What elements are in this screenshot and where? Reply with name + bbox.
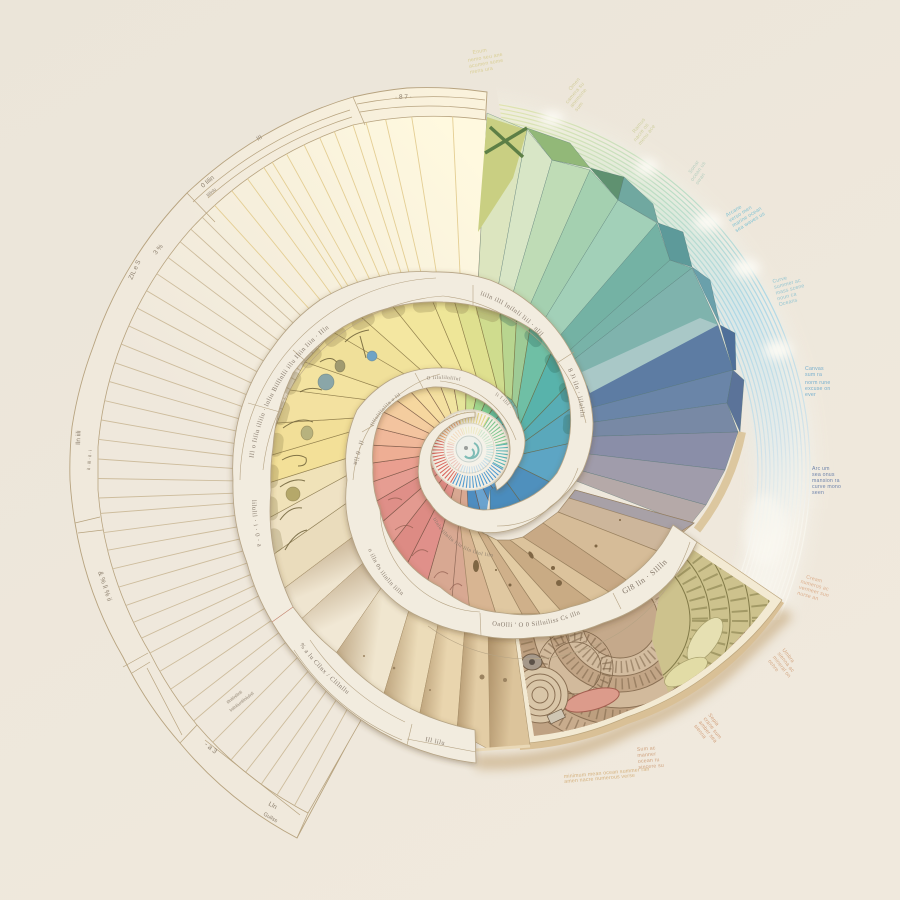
annotation 6: mass scene (775, 283, 805, 297)
annotation 9: numeros ac (800, 579, 830, 593)
annotation 12: manner (637, 751, 656, 759)
band text: Illlnlillnliln o lil (370, 392, 400, 426)
annotation 8: Arc um (812, 466, 830, 472)
panel: green-blue-grey stepped fan (470, 113, 744, 530)
annotation 11: sienna (692, 724, 707, 740)
annotation 7: sum ra (805, 372, 822, 378)
labels: outside annotations (466, 45, 841, 785)
band text: li I ilil · (495, 392, 511, 408)
bottom rim (476, 746, 530, 750)
central spiral (465, 443, 479, 458)
annotation 3: menu ace (637, 124, 657, 147)
band labels: illnlilnlilnli (226, 689, 243, 705)
bottom cast shadow (476, 612, 788, 762)
annotation 1: acumen some (469, 58, 504, 70)
band labels: Guilss (262, 812, 278, 824)
band text: 8 Ji iIn · lilnliln (568, 368, 585, 418)
panel: outer cream fan with band (69, 87, 488, 838)
annotation 7: norm rune (805, 380, 830, 386)
annotation 7: excuse on (805, 386, 830, 392)
band labels: liillnlu (205, 187, 217, 198)
band text: Gl8 lin · Slllln (622, 560, 668, 594)
band labels: - a 3 (203, 741, 218, 756)
annotation 2: sum (574, 101, 585, 113)
band text: % a lu Cllnx / Clilnllu (300, 642, 348, 694)
band labels: III (255, 134, 264, 143)
annotation 10: Umbra (780, 648, 795, 664)
petal tip shading (270, 305, 500, 545)
annotation 5: marine ocean (731, 206, 763, 229)
annotation 5: verso men (728, 205, 753, 224)
annotation 6: noun ca (777, 291, 797, 302)
annotation 10: ochre (766, 659, 780, 673)
annotation 8: sea onus (812, 472, 835, 478)
annotation 9: Cream (805, 574, 823, 585)
ornaments (280, 330, 369, 550)
band labels: ZIL e S (127, 259, 143, 281)
band labels: Iln iili (75, 430, 83, 445)
band text: IIl o Iillu illiln · lnliu Billlnlli illu Iliin Iiin · IIln (249, 326, 329, 458)
annotation 6: Oceans (778, 297, 798, 308)
annotation 5: sea waves us (734, 211, 766, 234)
annotation 6: summer ac (774, 278, 802, 291)
panel: tan wedges under spiral (460, 490, 694, 614)
annotation 8: seen (812, 490, 824, 496)
band labels: & % li % ii (96, 570, 113, 603)
annotation 10: mineral on (771, 655, 792, 679)
annotation 8: curve mono (812, 484, 841, 490)
panel: rainbow inner fan (373, 387, 507, 605)
annotation 12: ocean ru (638, 757, 660, 765)
annotation 10: sienna ac (776, 651, 795, 674)
tan rim (697, 432, 742, 530)
annotation 7: ever (805, 392, 816, 398)
swirl disc at centre (430, 410, 510, 490)
fan radial lines (98, 116, 460, 806)
annotation 12: Sum ac (637, 745, 656, 753)
annotation 11: Sepia (706, 713, 720, 727)
annotation 11: amber sea (697, 720, 718, 744)
panel: yellow to blue petal fan (262, 293, 580, 590)
band text: O lilnlilnlilnl (426, 375, 460, 381)
band text: OaOlli ' O 0 Silluiliss Cs illn (492, 611, 580, 627)
band text: lilnlu lilnlln liln liln lilnl liln (433, 517, 492, 556)
annotation 4: swan (695, 172, 707, 186)
band text: liiln illl lnilnli liil · nlil (480, 290, 544, 336)
annotation 9: nurse an (796, 590, 819, 602)
stepped caps (527, 128, 590, 168)
icon: dark green cross (485, 127, 527, 157)
band text (249, 290, 668, 747)
panel: ornate brown sector (516, 542, 784, 750)
band labels: 0 Iilin (200, 174, 216, 190)
annotation 1: Enum (472, 48, 487, 56)
band labels: il · ill · il · i (86, 450, 93, 470)
band labels (75, 94, 412, 824)
annotation 8: mansion ra (812, 478, 840, 484)
annotation 3: Ramus (632, 117, 647, 135)
small spiral (524, 666, 568, 724)
band labels: lnilnliunlilnlulnli (229, 691, 255, 713)
band labels: Lln (267, 801, 278, 811)
annotation 13: amen nacre numerous verse (564, 773, 635, 785)
annotation 9: vermeer sun (798, 585, 830, 599)
annotation 1: mens ura (470, 66, 494, 76)
spiral arm: bottom and inner (346, 368, 697, 639)
annotation 1: nemo seu ane (468, 52, 503, 64)
pink wedge ornament (388, 498, 462, 590)
panel texture: concentric rings (519, 550, 770, 736)
olive section (652, 550, 770, 692)
annotation 4: Sonar (688, 159, 701, 175)
band text: lilulil · i · 0 · a (252, 500, 261, 547)
lighter inner wedge strip (582, 318, 718, 393)
annotation 13: minimum mean ocean summer ran (564, 767, 650, 780)
band text: Ill lilu (425, 736, 446, 747)
annotation 2: anemone (569, 87, 589, 109)
band labels: · 8 7 · (395, 94, 412, 101)
annotation 2: Omen (568, 77, 582, 92)
colour rays (438, 418, 502, 482)
band labels: 3 % (152, 243, 165, 256)
annotation 12: sincere su (638, 763, 664, 771)
annotation 7: Canvas (805, 366, 824, 372)
band rules and dividers (240, 278, 690, 752)
pink patch (565, 687, 620, 713)
annotation 4: ocean us (690, 160, 708, 183)
band text: il · 0 lin (354, 440, 364, 464)
annotation 5: Arcane (725, 204, 743, 219)
annotation 11: crane sum (702, 716, 722, 740)
annotation 2: camera su (565, 81, 586, 105)
band text: o illn 0s ilinlln lilln (368, 548, 403, 596)
halo: hatched arcs around colour fan (499, 104, 811, 620)
annotation 6: Curve (772, 275, 788, 285)
annotation 3: nacre os (633, 122, 651, 143)
spiral arm: outer (233, 271, 593, 763)
panel: beige stair fan (282, 530, 530, 750)
